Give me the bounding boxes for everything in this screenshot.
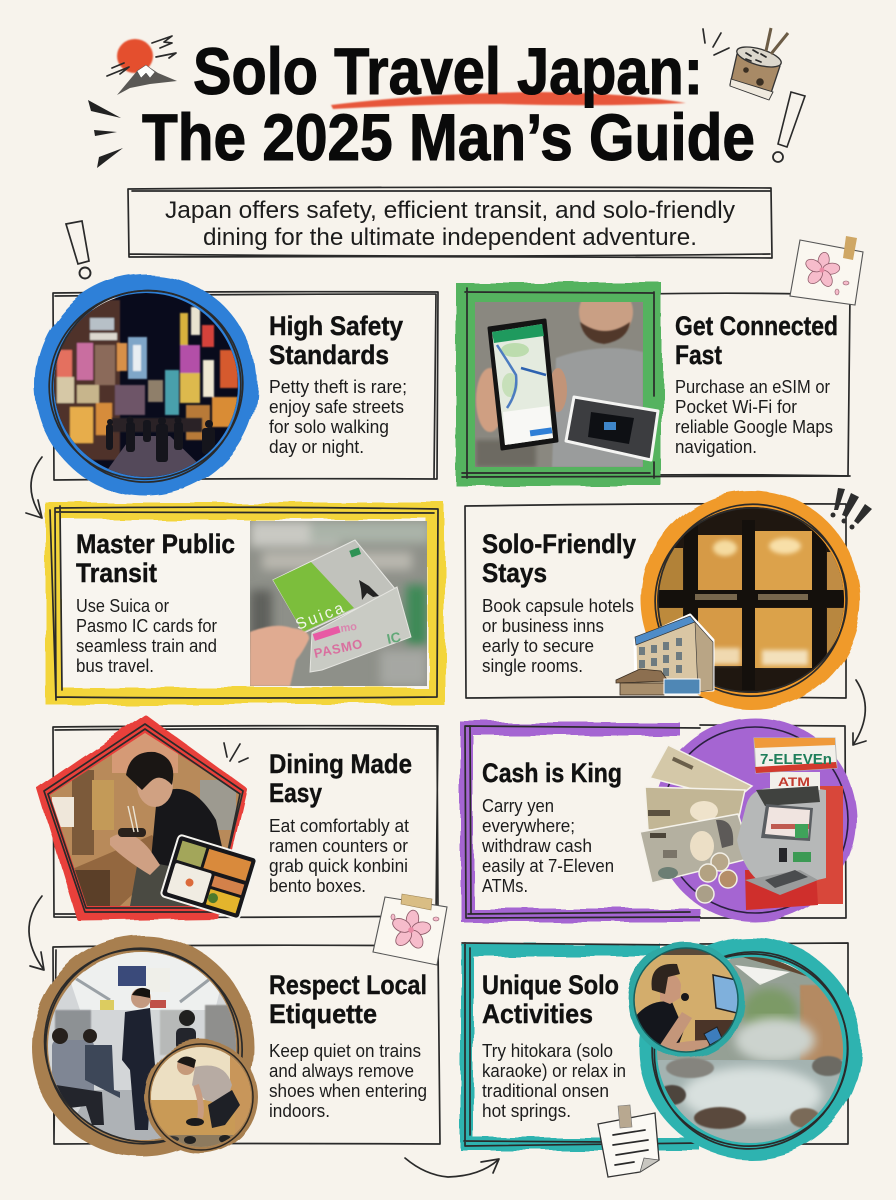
heading [76, 529, 235, 588]
arrow: etiquette to activities [405, 1158, 499, 1177]
heading [269, 749, 412, 808]
body text: ATMs. [482, 876, 528, 896]
Pasmo card [310, 587, 411, 672]
heading: Transit [76, 558, 157, 588]
body text: Pocket Wi-Fi for [675, 397, 797, 417]
body text [482, 596, 634, 676]
body text [269, 816, 409, 896]
body text: traditional onsen [482, 1081, 609, 1101]
icon: yen banknotes [640, 745, 752, 903]
icon: three exclamation marks [830, 488, 872, 530]
title: Solo Travel Japan: [193, 34, 703, 108]
Suica card [273, 540, 396, 634]
sketch lines around photo [640, 487, 864, 714]
body text: hot springs. [482, 1101, 571, 1121]
Pasmo card: mo [340, 621, 358, 635]
body text: seamless train and [76, 636, 217, 656]
body text [269, 377, 407, 457]
body text: early to secure [482, 636, 594, 656]
icon: top burst marks [703, 29, 729, 55]
body text: withdraw cash [481, 836, 592, 856]
body text: or business inns [482, 616, 604, 636]
heading: Standards [269, 340, 389, 370]
icon: business hotel building [616, 615, 713, 695]
body text: ramen counters or [269, 836, 408, 856]
heading: Stays [482, 558, 547, 588]
photo: capsule hotel pods [658, 507, 844, 693]
pocket Wi-Fi [566, 397, 658, 460]
teal brush frame [467, 950, 700, 1144]
body text: day or night. [269, 437, 364, 457]
icon: 7-Eleven ATM: 7-ELEVEn [760, 751, 832, 768]
heading: Unique Solo [482, 970, 619, 1000]
heading [482, 970, 619, 1029]
heading: Activities [482, 999, 593, 1029]
arrow: dining to etiquette [29, 896, 44, 970]
sticky note: cherry blossom [790, 236, 863, 305]
icon: burst marks [224, 743, 248, 762]
panel: Get Connected Fast [462, 285, 850, 478]
body text: reliable Google Maps [675, 417, 833, 437]
inset: solo karaoke [628, 942, 744, 1058]
body text [269, 1041, 427, 1121]
panel: Respect Local Etiquette [32, 934, 441, 1156]
heading: Dining Made [269, 749, 412, 779]
body text: shoes when entering [269, 1081, 427, 1101]
subtitle box: Japan offers safety, efficient transit, and solo-friendly [165, 197, 736, 224]
green brush frame [465, 292, 653, 477]
body text: bento boxes. [269, 876, 366, 896]
arrow: stays to cash [853, 680, 866, 745]
heading: High Safety [269, 311, 403, 341]
body text: everywhere; [482, 816, 575, 836]
sticky note: cherry blossom lower [373, 894, 447, 965]
panel: Unique Solo Activities [459, 938, 863, 1178]
heading: Get Connected [675, 311, 838, 341]
heading: Cash is King [482, 758, 622, 788]
phone [489, 320, 557, 449]
photo: Suica and Pasmo cards [250, 521, 430, 686]
icon: exclamation mark left [66, 221, 90, 278]
body text: Petty theft is rare; [269, 377, 407, 397]
heading [482, 529, 636, 588]
frame lines over green [462, 288, 850, 478]
photo: man eating at ramen counter [50, 733, 243, 906]
brush underline [331, 92, 686, 109]
photo: steaming onsen [657, 957, 843, 1143]
body text: single rooms. [482, 656, 583, 676]
panel: High Safety Standards [34, 274, 439, 496]
body text: Use Suica or [76, 596, 169, 616]
icon: Mount Fuji with red sun [107, 36, 177, 95]
Suica card: Suica [293, 599, 348, 634]
body text [675, 377, 833, 457]
sketch lines around photo [9, 913, 277, 1178]
body text: Carry yen [482, 796, 554, 816]
body text: Try hitokara (solo [482, 1041, 613, 1061]
orange brush ring [651, 500, 851, 700]
heading: Respect Local [269, 970, 427, 1000]
heading: Easy [269, 778, 322, 808]
body text: Pasmo IC cards for [76, 616, 217, 636]
passengers [52, 988, 196, 1130]
body text: enjoy safe streets [269, 397, 404, 417]
panel: Cash is King [465, 718, 857, 922]
body text [482, 1041, 626, 1121]
heading: Etiquette [269, 999, 377, 1029]
Pasmo card: IC [385, 628, 402, 647]
body text: bus travel. [76, 656, 154, 676]
teal brush ring [649, 947, 851, 1149]
body text: Book capsule hotels [482, 596, 634, 616]
heading [269, 311, 403, 370]
panel: Solo-Friendly Stays [465, 487, 864, 714]
body text [76, 596, 217, 676]
heading [269, 970, 427, 1029]
inset: removing shoes [144, 1040, 258, 1154]
icon: 7-Eleven ATM: ATM [778, 775, 810, 789]
brown brush ring [40, 944, 244, 1148]
body text: and always remove [269, 1061, 414, 1081]
hand [250, 626, 309, 686]
body text: easily at 7-Eleven [482, 856, 614, 876]
yellow brush frame [54, 511, 436, 696]
photo: neon Tokyo street [50, 290, 240, 480]
body text: grab quick konbini [269, 856, 408, 876]
title [142, 34, 755, 174]
body text: Keep quiet on trains [269, 1041, 421, 1061]
body text: Eat comfortably at [269, 816, 409, 836]
heading: Solo-Friendly [482, 529, 636, 559]
icon: 7-Eleven ATM [737, 738, 843, 910]
icon: paper note with tape [598, 1105, 659, 1177]
body text: indoors. [269, 1101, 330, 1121]
heading [675, 311, 838, 370]
body text [481, 796, 614, 896]
subtitle box: dining for the ultimate independent adventure. [203, 224, 697, 251]
icon: exclamation mark right of title [773, 92, 805, 162]
body text: navigation. [675, 437, 757, 457]
icon: rice bowl with chopsticks [730, 28, 788, 100]
purple brush frame [467, 729, 700, 915]
sketch lines around photo [622, 920, 880, 1181]
blue brush ring [45, 284, 247, 486]
panel: Dining Made Easy [40, 717, 438, 920]
heading: Master Public [76, 529, 235, 559]
photo: phone with map and pocket Wi-Fi [475, 285, 643, 467]
sketch lines around photo [44, 724, 243, 912]
body text: karaoke) or relax in [482, 1061, 626, 1081]
body text: for solo walking [269, 417, 389, 437]
icon: bento box [160, 834, 258, 920]
sketch lines around photo [25, 264, 268, 509]
red brush pentagon [40, 717, 245, 918]
arrow: safety to transit [26, 457, 42, 518]
purple brush circle [653, 718, 857, 922]
panel: Master Public Transit [50, 506, 438, 700]
heading: Fast [675, 340, 722, 370]
icon: left burst marks [88, 100, 123, 168]
subtitle box [128, 187, 772, 258]
body text: Purchase an eSIM or [675, 377, 830, 397]
photo: quiet train carriage [45, 950, 240, 1145]
title: The 2025 Man’s Guide [142, 100, 755, 174]
Pasmo card: PASMO [313, 636, 364, 661]
